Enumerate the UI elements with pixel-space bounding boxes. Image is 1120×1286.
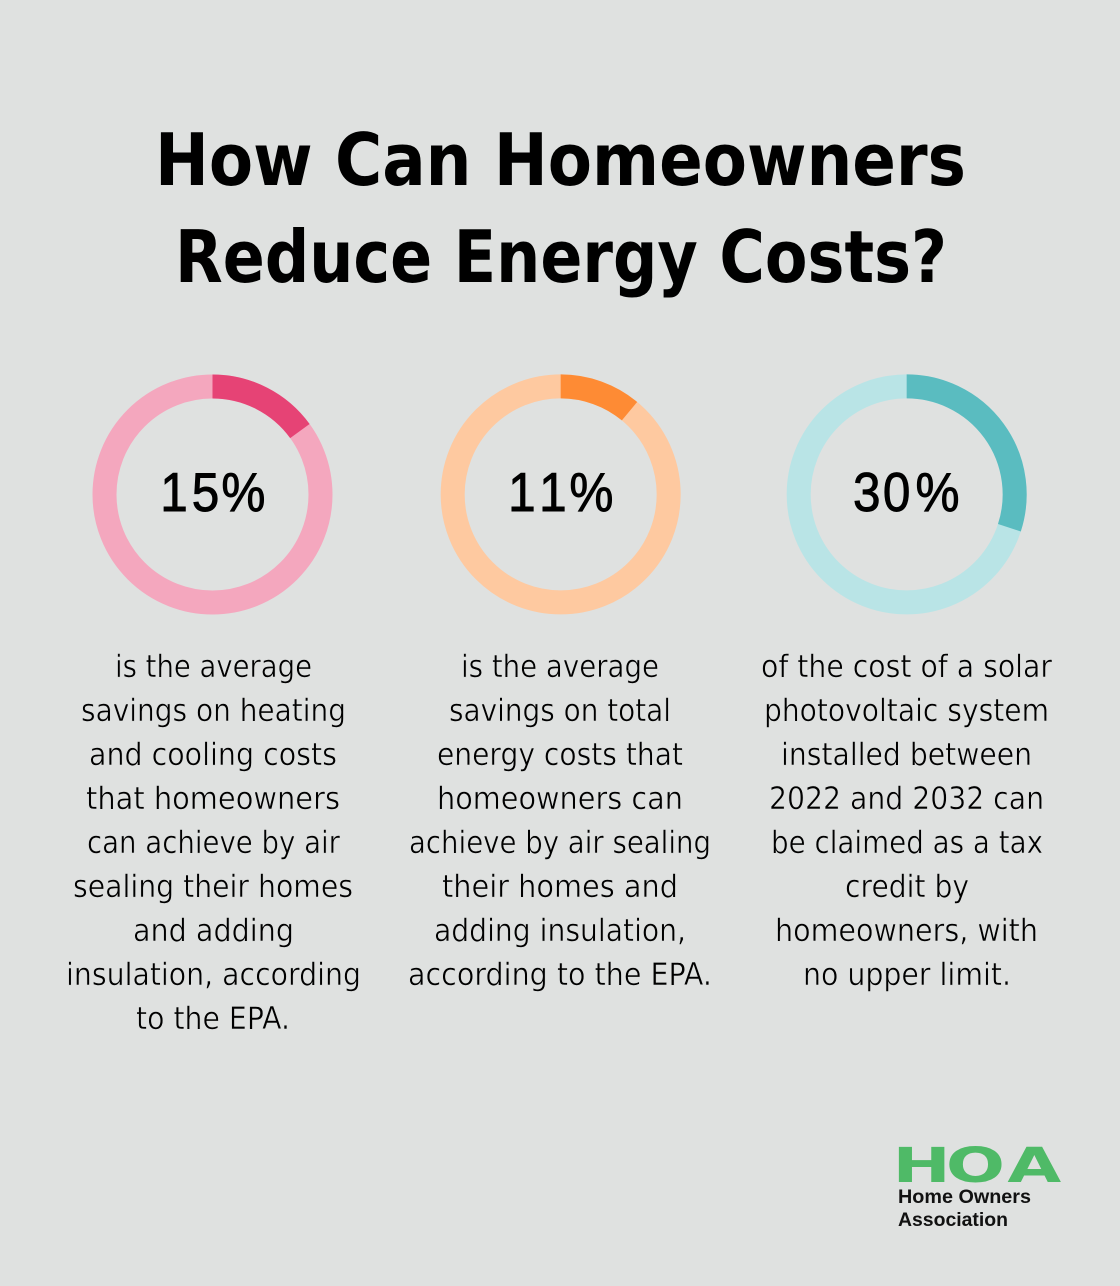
text block: total energy savings: adding insulation,	[434, 913, 686, 949]
panel: 30% solar tax credit	[761, 386, 1052, 993]
donut chart: 30%: 30%	[853, 463, 959, 524]
text block: total energy savings: achieve by air sealing	[409, 825, 711, 861]
text block: heating and cooling savings: insulation, according	[66, 957, 361, 993]
text block: solar tax credit: 2022 and 2032 can	[769, 781, 1044, 817]
panel: 11% total energy savings	[408, 386, 712, 993]
text block: solar tax credit: credit by	[845, 869, 969, 905]
text block: solar tax credit: homeowners, with	[775, 913, 1038, 949]
text block: solar tax credit: be claimed as a tax	[771, 825, 1043, 861]
donut chart: 30%	[799, 386, 1015, 602]
donut chart: 11%	[453, 386, 669, 602]
text block: heating and cooling savings: can achieve by air	[87, 825, 340, 861]
logo: Home Owners Association: Association	[898, 1210, 1008, 1231]
text block: heating and cooling savings: that homeowners	[86, 781, 340, 817]
donut chart: 15%	[104, 386, 320, 602]
logo: Home Owners Association	[892, 1139, 1061, 1231]
text block: heating and cooling savings: and adding	[133, 913, 294, 949]
text block: total energy savings: homeowners can	[437, 781, 683, 817]
text block: heating and cooling savings: and cooling costs	[89, 737, 337, 773]
text block: total energy savings: according to the EPA.	[408, 957, 712, 993]
text block: total energy savings: energy costs that	[437, 737, 683, 773]
text block: solar tax credit: installed between	[781, 737, 1032, 773]
text block: total energy savings	[408, 649, 712, 993]
text block: solar tax credit	[761, 649, 1052, 993]
title: How Can Homeowners	[155, 118, 966, 202]
text block: heating and cooling savings: sealing their homes	[73, 869, 353, 905]
text block: heating and cooling savings: is the average	[115, 649, 312, 685]
text block: solar tax credit: of the cost of a solar	[761, 649, 1052, 685]
panel: 15% heating and cooling savings	[66, 386, 361, 1037]
donut chart: 11%: 11%	[508, 463, 613, 524]
donut chart: 15%: 15%	[160, 463, 265, 524]
text block: total energy savings: is the average	[461, 649, 659, 685]
logo: Home Owners Association: HOA	[892, 1139, 1061, 1194]
logo: Home Owners Association: Home Owners	[898, 1187, 1031, 1208]
title: Reduce Energy Costs?	[175, 215, 947, 299]
text block: solar tax credit: no upper limit.	[803, 957, 1011, 993]
text block: total energy savings: savings on total	[449, 693, 671, 729]
text block: heating and cooling savings: savings on heating	[81, 693, 346, 729]
text block: solar tax credit: photovoltaic system	[764, 693, 1049, 729]
text block: total energy savings: their homes and	[442, 869, 678, 905]
text block: heating and cooling savings	[66, 649, 361, 1037]
text block: heating and cooling savings: to the EPA.	[136, 1001, 290, 1037]
title	[155, 118, 966, 299]
